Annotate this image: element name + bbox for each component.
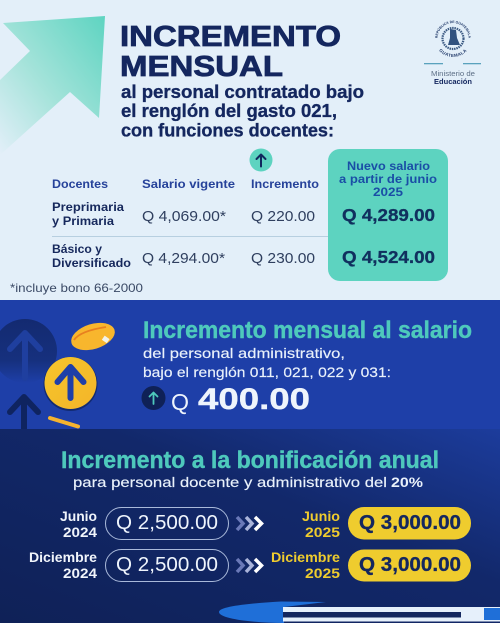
title: INCREMENTO bbox=[120, 21, 341, 53]
logo: Ministerio de Educación: Ministerio de bbox=[431, 69, 475, 78]
subtitle: con funciones docentes: bbox=[121, 120, 334, 140]
row: June: Q 3,000.00 bbox=[359, 512, 461, 534]
panel: new salary bbox=[328, 149, 448, 281]
row: June: Junio bbox=[302, 509, 340, 524]
row: December: Diciembre bbox=[29, 550, 98, 565]
text: administrative staff: bajo el renglón 011, 021, 022 y 031: bbox=[143, 364, 391, 380]
table headers: Incremento bbox=[251, 177, 319, 191]
heading: annual bonus increase: Incremento a la bonificación anual bbox=[61, 447, 439, 474]
row: December: Q 2,500.00 bbox=[116, 554, 218, 576]
title bbox=[120, 21, 341, 83]
table headers: Salario vigente bbox=[142, 177, 235, 191]
logo: Ministerio de Educación: GUATEMALA bbox=[440, 49, 467, 57]
coins and arrows illustration bbox=[0, 318, 118, 430]
heading: monthly salary increase: Incremento mensual al salario bbox=[143, 317, 472, 344]
table row: Básico y Diversificado: Q 230.00 bbox=[251, 250, 315, 267]
text: administrative staff: del personal administrativo, bbox=[143, 345, 345, 361]
row: June: Junio bbox=[60, 509, 97, 524]
panel: new salary: Q 4,524.00 bbox=[342, 247, 435, 267]
table headers: Docentes bbox=[52, 177, 108, 191]
row: December: 2025 bbox=[305, 566, 341, 581]
title: MENSUAL bbox=[120, 51, 283, 83]
panel: new salary: a partir de junio bbox=[339, 174, 437, 186]
amount: Q 400.00: 400.00 bbox=[198, 383, 310, 416]
table row: Básico y Diversificado: Básico y bbox=[52, 242, 102, 256]
icon: increment up arrow bbox=[250, 148, 272, 172]
decorative teal arrow bbox=[0, 16, 105, 155]
logo: Ministerio de Educación: Educación bbox=[434, 77, 472, 86]
subtitle bbox=[121, 81, 364, 140]
footnote: *incluye bono 66-2000 bbox=[10, 281, 143, 295]
amount: Q 400.00 bbox=[171, 383, 310, 416]
subtitle: el renglón del gasto 021, bbox=[121, 100, 337, 121]
panel: administrative increase bbox=[0, 300, 500, 430]
icon: small up arrow bbox=[142, 386, 166, 410]
row: June: 2025 bbox=[305, 525, 341, 540]
row: December: Diciembre bbox=[271, 550, 341, 565]
table row: Preprimaria y Primaria: Q 4,069.00* bbox=[142, 208, 226, 225]
row: December: 2024 bbox=[63, 566, 98, 581]
table row: Preprimaria y Primaria bbox=[52, 200, 315, 228]
row: December bbox=[29, 550, 471, 582]
row: June: 2024 bbox=[63, 525, 98, 540]
text: bonus scope: 20% bbox=[391, 474, 424, 490]
row: June bbox=[60, 507, 471, 540]
panel: annual bonus bbox=[0, 429, 500, 623]
panel: new salary: Q 4,289.00 bbox=[342, 205, 435, 225]
table row: Básico y Diversificado: Diversificado bbox=[52, 256, 131, 270]
text: administrative staff bbox=[143, 345, 391, 380]
table row: Preprimaria y Primaria: y Primaria bbox=[52, 214, 114, 228]
panel: new salary: Nuevo salario bbox=[347, 161, 430, 173]
text: bonus scope: para personal docente y administrativo del bbox=[73, 474, 387, 490]
table headers bbox=[52, 177, 319, 191]
table row: Preprimaria y Primaria: Q 220.00 bbox=[251, 208, 315, 225]
pen illustration bbox=[219, 602, 500, 623]
row: December: Q 3,000.00 bbox=[359, 554, 461, 576]
table row: Preprimaria y Primaria: Preprimaria bbox=[52, 200, 124, 214]
logo: Ministerio de Educación: REPÚBLICA DE GUATEMALA bbox=[435, 20, 471, 38]
logo: Ministerio de Educación bbox=[424, 20, 481, 86]
row: June: Q 2,500.00 bbox=[116, 512, 218, 534]
subtitle: al personal contratado bajo bbox=[121, 81, 364, 102]
amount: Q 400.00: Q bbox=[171, 389, 189, 415]
table row: Básico y Diversificado bbox=[52, 242, 315, 270]
table row: Básico y Diversificado: Q 4,294.00* bbox=[142, 250, 225, 267]
panel: new salary: 2025 bbox=[373, 187, 404, 199]
